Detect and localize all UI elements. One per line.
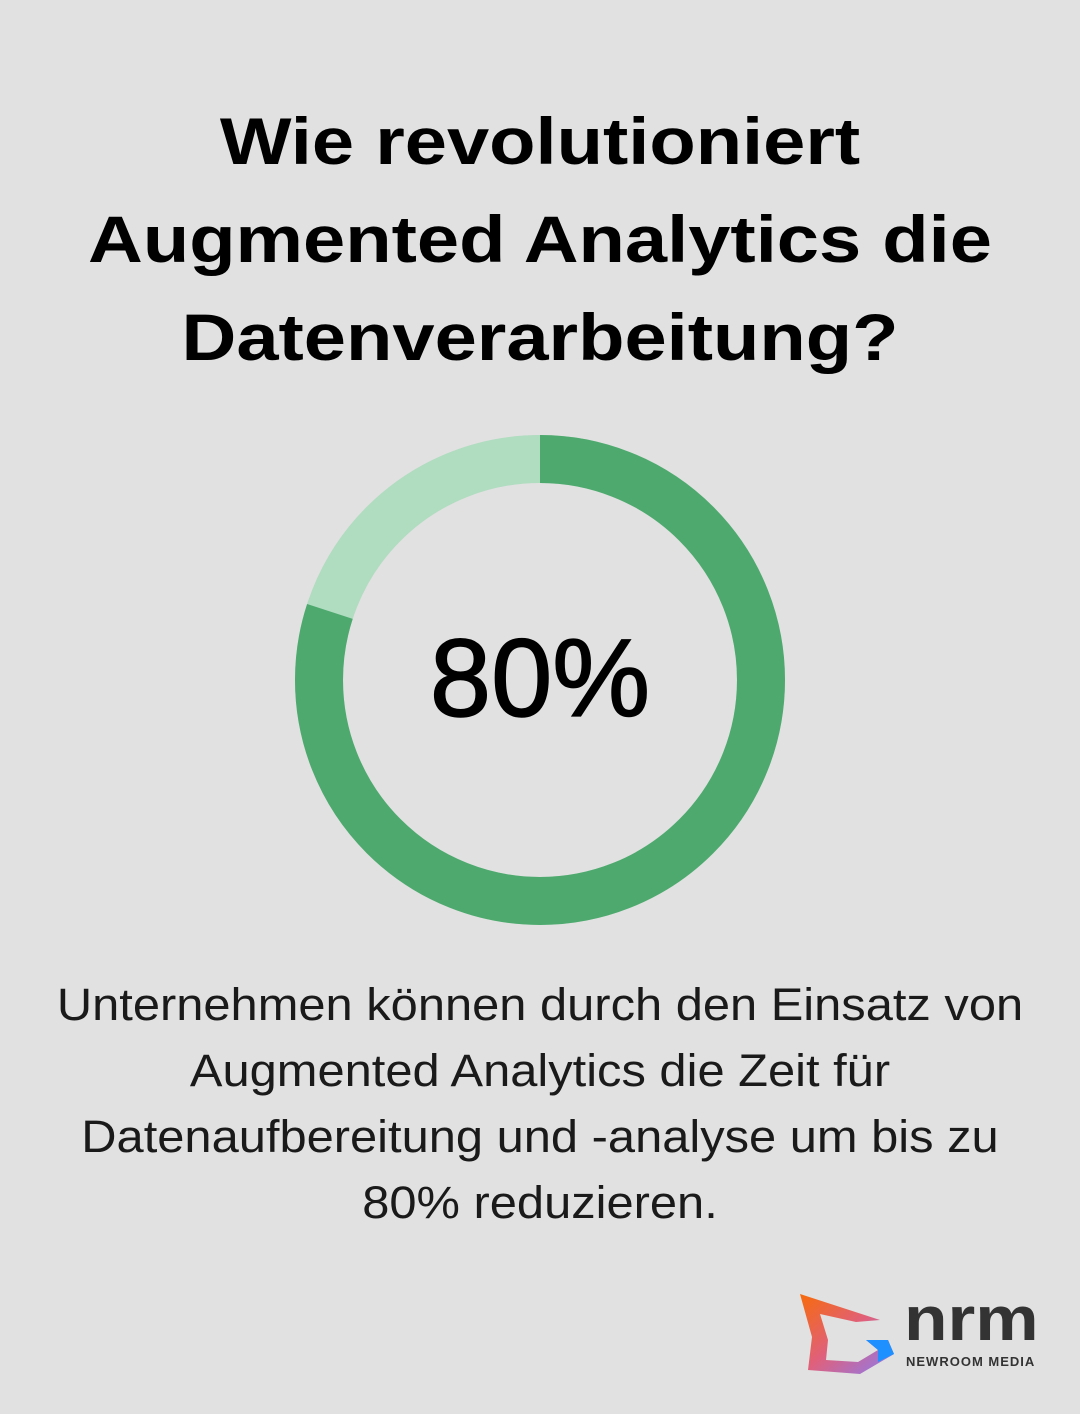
description text: [57, 979, 1023, 1228]
description text: Augmented Analytics die Zeit für: [190, 1045, 890, 1096]
title: Augmented Analytics die: [88, 202, 992, 276]
logo: [800, 1285, 1039, 1374]
description text: Datenaufbereitung und -analyse um bis zu: [81, 1111, 999, 1162]
percentage: 80%: [430, 617, 650, 740]
description text: Unternehmen können durch den Einsatz von: [57, 979, 1023, 1030]
title: [88, 104, 992, 374]
logo text: nrm: [904, 1285, 1039, 1354]
donut chart: [295, 435, 785, 925]
description text: 80% reduzieren.: [362, 1177, 718, 1228]
logo: NEWROOM MEDIA: [906, 1354, 1035, 1369]
title: Datenverarbeitung?: [182, 300, 898, 374]
title: Wie revolutioniert: [220, 104, 860, 178]
icon: logo mark: [800, 1294, 894, 1374]
